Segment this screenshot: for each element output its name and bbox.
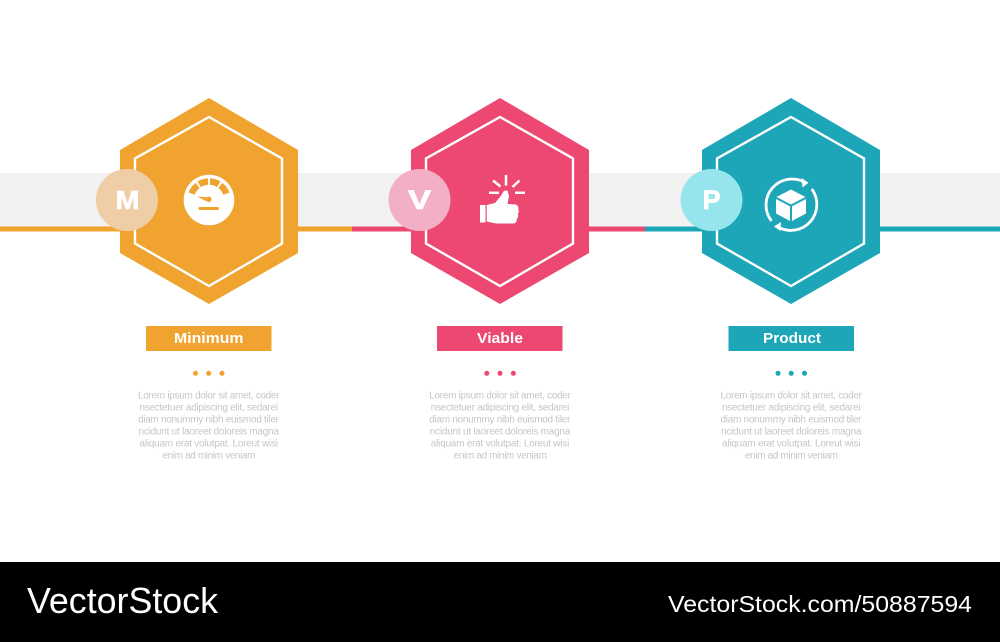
- badge: V: [388, 169, 450, 231]
- dots: [193, 371, 224, 376]
- description text: [720, 390, 863, 462]
- badge: V: V: [408, 185, 431, 215]
- panel: product: [680, 98, 880, 462]
- description text: [138, 390, 280, 462]
- badge: M: M: [116, 185, 140, 215]
- description text: [429, 390, 571, 462]
- description text: Lorem ipsum dolor sit amet, coder: [138, 390, 280, 402]
- panel: minimum: [96, 98, 298, 462]
- footer logo: VectorStock: [27, 580, 219, 621]
- hexagon: viable: [411, 98, 589, 304]
- hexagon: product: [702, 98, 880, 304]
- description text: nsectetuer adipiscing elit, sedarei: [722, 402, 860, 414]
- dots: [484, 371, 516, 376]
- description text: Lorem ipsum dolor sit amet, coder: [720, 390, 863, 402]
- description text: enim ad minim veniam: [162, 450, 256, 462]
- icon: thumbs up: [480, 175, 525, 224]
- label: Minimum: Minimum: [174, 331, 244, 347]
- label: Minimum: [146, 326, 272, 351]
- description text: ncidunt ut laoreet doloreis magna: [430, 426, 571, 438]
- description text: aliquam erat volutpat. Loreut wisi: [140, 438, 278, 450]
- label: Viable: Viable: [477, 331, 523, 347]
- description text: Lorem ipsum dolor sit amet, coder: [429, 390, 571, 402]
- icon: speedometer: [184, 175, 234, 225]
- label: Product: [728, 326, 854, 351]
- description text: diam nonummy nibh euismod tiler: [138, 414, 280, 426]
- description text: ncidunt ut laoreet doloreis magna: [721, 426, 862, 438]
- badge: M: [96, 169, 158, 231]
- panel: viable: [388, 98, 589, 462]
- footer bar: [0, 562, 1000, 642]
- description text: aliquam erat volutpat. Loreut wisi: [431, 438, 569, 450]
- description text: enim ad minim veniam: [454, 450, 547, 462]
- label: Viable: [437, 326, 562, 351]
- icon: rotating box: [766, 178, 817, 231]
- description text: aliquam erat volutpat. Loreut wisi: [722, 438, 860, 450]
- badge: P: [680, 169, 742, 231]
- description text: ncidunt ut laoreet doloreis magna: [138, 426, 279, 438]
- description text: nsectetuer adipiscing elit, sedarei: [140, 402, 278, 414]
- description text: diam nonummy nibh euismod tiler: [429, 414, 571, 426]
- description text: diam nonummy nibh euismod tiler: [720, 414, 862, 426]
- description text: nsectetuer adipiscing elit, sedarei: [431, 402, 569, 414]
- hexagon: minimum: [120, 98, 298, 304]
- description text: enim ad minim veniam: [745, 450, 838, 462]
- label: Product: Product: [763, 331, 821, 347]
- dots: [776, 371, 807, 376]
- footer url: VectorStock.com/50887594: [668, 591, 972, 617]
- badge: P: P: [702, 185, 720, 215]
